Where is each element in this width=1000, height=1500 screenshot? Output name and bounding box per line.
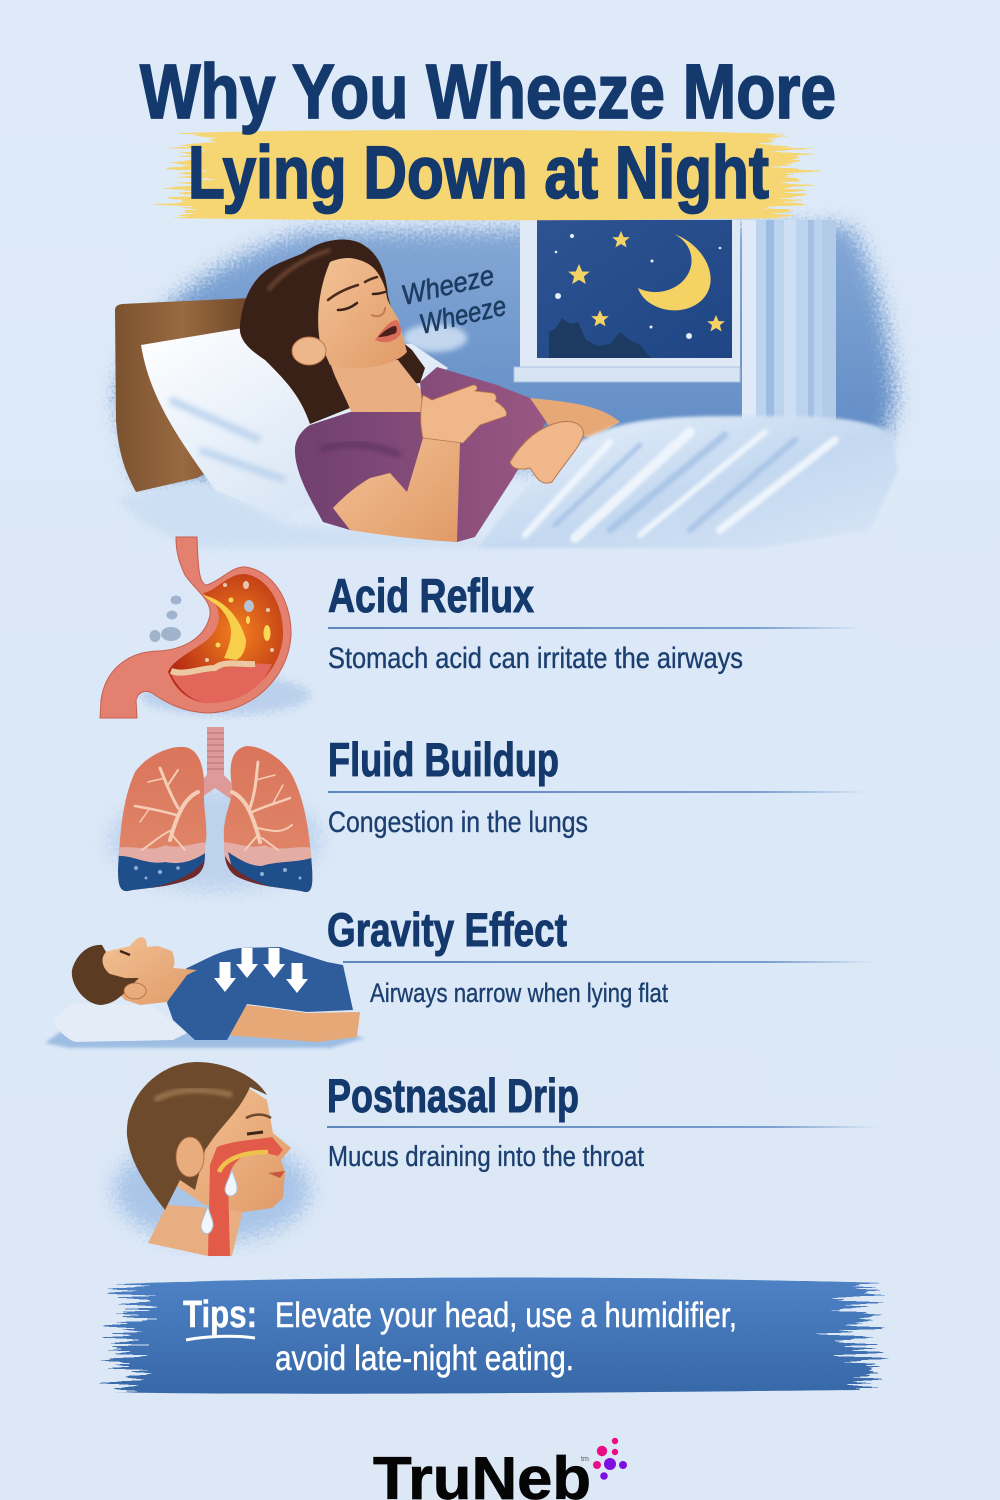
window sill — [514, 367, 740, 382]
shirt — [295, 367, 549, 542]
moon — [638, 234, 711, 310]
open mouth — [375, 320, 401, 342]
bed sheet — [118, 480, 520, 548]
hero illustration: woman wheezing in bed — [115, 220, 898, 548]
smudge behind wheeze — [403, 324, 467, 352]
pillow — [141, 328, 448, 518]
heading: gravity effect: Gravity Effect — [327, 903, 567, 956]
icon: head profile — [114, 1062, 310, 1256]
blanket folds — [525, 432, 835, 538]
tips text line two: avoid late-night eating. — [275, 1339, 574, 1378]
wheeze text: Wheeze — [398, 259, 497, 311]
window — [514, 220, 740, 382]
left lung — [118, 746, 206, 892]
mucus — [219, 1152, 268, 1172]
ear — [176, 1137, 204, 1177]
hand on belly — [510, 422, 583, 483]
hair — [240, 240, 425, 424]
title — [140, 49, 836, 220]
panel: postnasal drip — [114, 1062, 879, 1256]
headboard — [115, 298, 250, 492]
face — [175, 1087, 291, 1212]
trees — [549, 318, 651, 358]
description: gravity effect: Airways narrow when lying flat — [370, 978, 668, 1008]
tips banner — [125, 1277, 862, 1394]
pillow — [52, 1003, 187, 1042]
acid droplets outside — [150, 596, 182, 642]
description: postnasal drip: Mucus draining into the throat — [328, 1141, 644, 1173]
right lung — [224, 746, 312, 892]
stars — [568, 231, 725, 331]
blanket — [478, 416, 898, 548]
icon: lungs — [110, 727, 320, 895]
mucus drops — [201, 1170, 237, 1234]
upper arm — [530, 398, 620, 438]
wheeze text — [398, 259, 509, 340]
title line one: Why You Wheeze More — [140, 49, 836, 135]
arm — [225, 1005, 360, 1042]
panel: gravity effect — [45, 903, 873, 1048]
panel: fluid buildup — [110, 727, 866, 895]
description: fluid buildup: Congestion in the lungs — [328, 806, 588, 839]
neck and face — [100, 937, 197, 1005]
neck and chest — [330, 360, 445, 414]
shirt — [167, 947, 353, 1040]
floor shadow — [45, 1032, 365, 1048]
banner brush — [125, 1277, 862, 1394]
face — [318, 258, 407, 368]
forearm on chest — [333, 438, 460, 542]
description: acid reflux: Stomach acid can irritate the airways — [328, 642, 743, 675]
icon: stomach — [100, 537, 310, 718]
hand on chest — [421, 385, 507, 443]
tips text line one: Elevate your head, use a humidifier, — [275, 1296, 737, 1335]
acid flame — [203, 595, 246, 660]
hair — [127, 1062, 267, 1210]
neck — [148, 1205, 243, 1256]
facial features — [328, 277, 385, 316]
hair — [72, 945, 139, 1005]
title line two: Lying Down at Night — [188, 131, 769, 214]
panel: acid reflux — [100, 537, 863, 718]
closed eye — [120, 951, 130, 955]
wall backdrop — [118, 226, 895, 480]
wheeze text: Wheeze — [416, 290, 509, 340]
logo dots — [593, 1438, 627, 1480]
stomach interior — [168, 574, 283, 703]
gravity arrows — [214, 948, 308, 993]
ear — [292, 337, 326, 365]
heading: fluid buildup: Fluid Buildup — [328, 733, 559, 786]
heading: acid reflux: Acid Reflux — [328, 569, 534, 622]
bronchial branches — [135, 762, 292, 850]
curtain — [742, 220, 836, 420]
title highlight brush — [190, 130, 792, 220]
tips label: Tips: — [183, 1294, 257, 1336]
trachea — [190, 727, 240, 800]
ear — [124, 983, 146, 999]
icon: man lying flat — [45, 937, 365, 1048]
nasal and throat passage — [208, 1137, 283, 1256]
heading: postnasal drip: Postnasal Drip — [327, 1069, 579, 1122]
eye and lips — [247, 1132, 263, 1134]
logo: TruNeb: tm — [581, 1456, 589, 1463]
stomach lining — [170, 663, 272, 703]
